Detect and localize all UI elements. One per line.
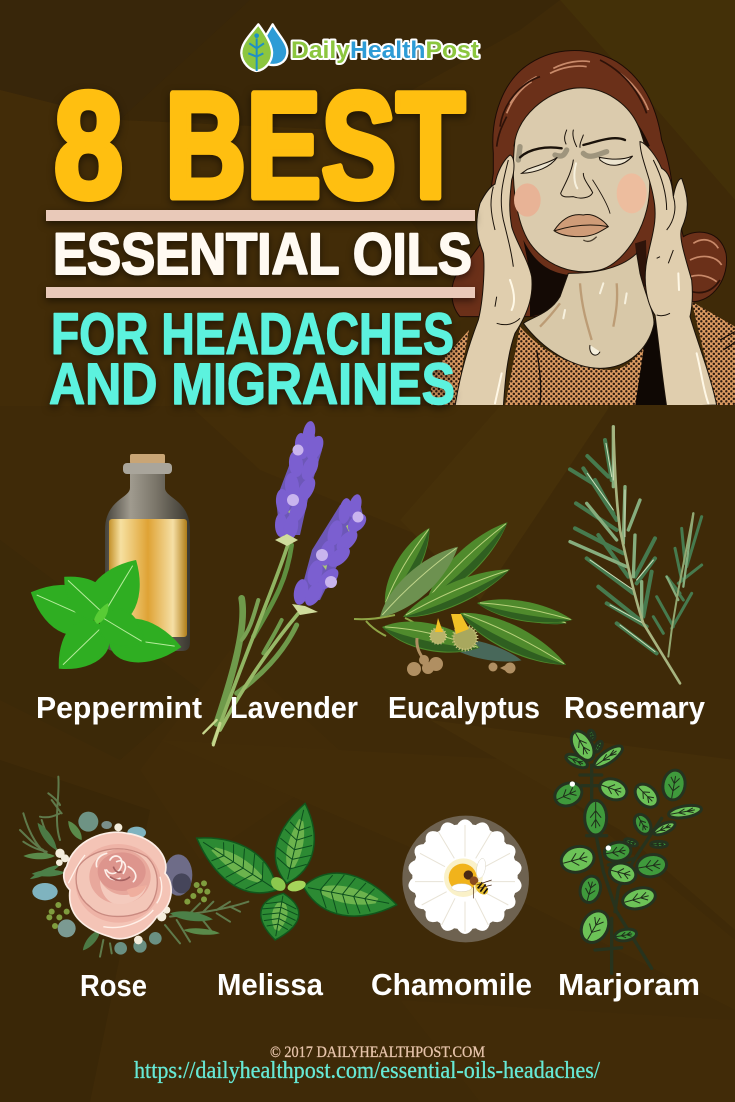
- label: Marjoram: [558, 967, 700, 1002]
- title: [46, 61, 475, 417]
- shirt: [431, 302, 735, 407]
- illustration: woman with headache: [431, 51, 735, 407]
- bee: [452, 858, 492, 898]
- hair: [452, 51, 727, 317]
- stems: [203, 543, 298, 745]
- cheek blush: [514, 183, 541, 217]
- label: Rosemary: [564, 690, 706, 725]
- heading: 8 BEST: BEST: [165, 61, 465, 229]
- marjoram plant: [551, 727, 702, 973]
- label: Lavender: [230, 690, 358, 725]
- copyright: © 2017 DAILYHEALTHPOST.COM: [270, 1044, 485, 1061]
- source url: https://dailyhealthpost.com/essential-oils-headaches/: [134, 1058, 600, 1084]
- rose bloom: [64, 832, 171, 939]
- face: [513, 88, 650, 272]
- label: Peppermint: [36, 690, 202, 725]
- icon: oil bottle: [105, 454, 190, 651]
- heading: 8 BEST: [54, 61, 465, 229]
- divider bar bottom: [46, 287, 475, 298]
- melissa leaves: [186, 799, 401, 943]
- footer: [134, 1044, 600, 1084]
- logo: [241, 24, 287, 71]
- neck and chest: [523, 253, 654, 368]
- marjoram: [551, 727, 702, 1002]
- heading: essential oils: ESSENTIAL OILS: [53, 222, 472, 287]
- eucalyptus gum nuts: [407, 638, 516, 676]
- heading: for headaches: FOR HEADACHES: [51, 302, 454, 367]
- rosemary sprig: [570, 427, 702, 683]
- right arm and hand: [640, 142, 717, 407]
- brows, eyes and nose: [518, 130, 633, 213]
- melissa: [186, 799, 401, 1002]
- peppermint: [22, 454, 202, 725]
- eucalyptus: [354, 514, 574, 725]
- divider bar top: [46, 210, 475, 221]
- label: Chamomile: [371, 967, 532, 1002]
- label: Eucalyptus: [388, 690, 540, 725]
- lavender: [203, 420, 370, 745]
- right cheek blush: [617, 173, 647, 213]
- eucalyptus branch: [354, 514, 574, 676]
- label: Rose: [80, 968, 147, 1003]
- heading: 8 BEST: 8: [54, 61, 123, 229]
- plate: [402, 816, 529, 942]
- rose: [20, 777, 248, 1003]
- label: Melissa: [217, 967, 324, 1002]
- rosemary: [564, 427, 706, 725]
- icon: leaf and water drops: [241, 24, 287, 71]
- mouth: [554, 215, 608, 241]
- flower spike one: [275, 420, 327, 546]
- foliage: [20, 777, 248, 957]
- heading: and migraines: AND MIGRAINES: [49, 352, 455, 417]
- left arm and hand: [455, 155, 532, 407]
- chamomile: [371, 816, 532, 1002]
- flower spike two: [292, 493, 370, 615]
- icon: mint leaves: [22, 549, 183, 683]
- white flower: [407, 819, 523, 934]
- logo wordmark: DailyHealthPost: [291, 37, 479, 64]
